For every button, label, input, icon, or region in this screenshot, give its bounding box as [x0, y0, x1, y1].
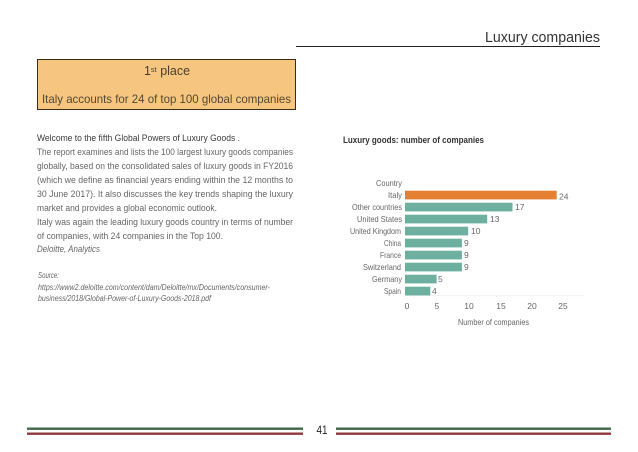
- value labels: 5: [438, 274, 443, 284]
- category labels: Switzerland: [363, 262, 401, 272]
- text block: introduction: (which we define as financial years ending within the 12 months to: [37, 175, 293, 185]
- callout: 1st place: [38, 60, 296, 110]
- text block: introduction: Welcome to the fifth Global Powers of Luxury Goods .: [37, 133, 240, 143]
- chart title: Luxury goods: number of companies: [343, 135, 484, 145]
- x axis ticks: 25: [558, 301, 568, 311]
- category labels: Other countries: [352, 202, 402, 212]
- callout: 1st place: Italy accounts for 24 of top 100 global companies: [42, 92, 291, 106]
- footer: page number and tricolour rules: 41: [316, 425, 328, 437]
- text block: source: business/2018/Global-Power-of-Luxury-Goods-2018.pdf: [38, 294, 212, 303]
- category labels: Italy: [388, 190, 403, 200]
- page heading: Luxury companies: [485, 29, 600, 46]
- text block: introduction: 30 June 2017). It also discusses the key trends shaping the luxury: [37, 189, 293, 199]
- bar chart: number of companies by country: [350, 178, 584, 327]
- text block: introduction: The report examines and lists the 100 largest luxury goods companies: [37, 147, 293, 157]
- x axis ticks: 20: [527, 301, 537, 311]
- text block: source: Source:: [38, 271, 59, 280]
- value labels: 4: [432, 286, 437, 296]
- category labels: Country: [376, 178, 403, 188]
- x axis ticks: 10: [464, 301, 474, 311]
- value labels: 13: [490, 214, 500, 224]
- text block: introduction: market and provides a global economic outlook.: [37, 203, 217, 213]
- bars: [405, 191, 557, 295]
- x axis ticks: [405, 301, 568, 311]
- category labels: United States: [357, 214, 402, 224]
- category labels: Germany: [372, 274, 403, 284]
- category labels: [350, 178, 403, 296]
- x axis title: Number of companies: [458, 317, 529, 327]
- callout: 1st place: 1: [144, 64, 151, 78]
- text block: introduction: of companies, with 24 companies in the Top 100.: [37, 231, 223, 241]
- text block: introduction: globally, based on the consolidated sales of luxury goods in FY2016: [37, 161, 293, 171]
- text block: introduction: Deloitte, Analytics: [37, 244, 100, 254]
- value labels: 10: [471, 226, 481, 236]
- category labels: China: [384, 238, 401, 248]
- text block: source: [38, 271, 270, 303]
- x axis ticks: 5: [435, 301, 440, 311]
- category labels: Spain: [384, 286, 401, 296]
- value labels: 9: [464, 238, 469, 248]
- value labels: [432, 192, 569, 296]
- category labels: United Kingdom: [350, 226, 401, 236]
- value labels: 9: [464, 262, 469, 272]
- value labels: 17: [515, 202, 525, 212]
- callout: 1st place: st: [151, 65, 158, 74]
- text block: source: https://www2.deloitte.com/content/dam/Deloitte/mx/Documents/consumer-: [38, 283, 270, 292]
- text block: introduction: [37, 133, 293, 254]
- category labels: France: [380, 250, 401, 260]
- text block: introduction: Italy was again the leading luxury goods country in terms of number: [37, 217, 293, 227]
- x axis ticks: 0: [405, 301, 410, 311]
- callout: 1st place: place: [157, 64, 190, 78]
- value labels: 24: [559, 192, 569, 202]
- value labels: 9: [464, 250, 469, 260]
- x axis ticks: 15: [496, 301, 506, 311]
